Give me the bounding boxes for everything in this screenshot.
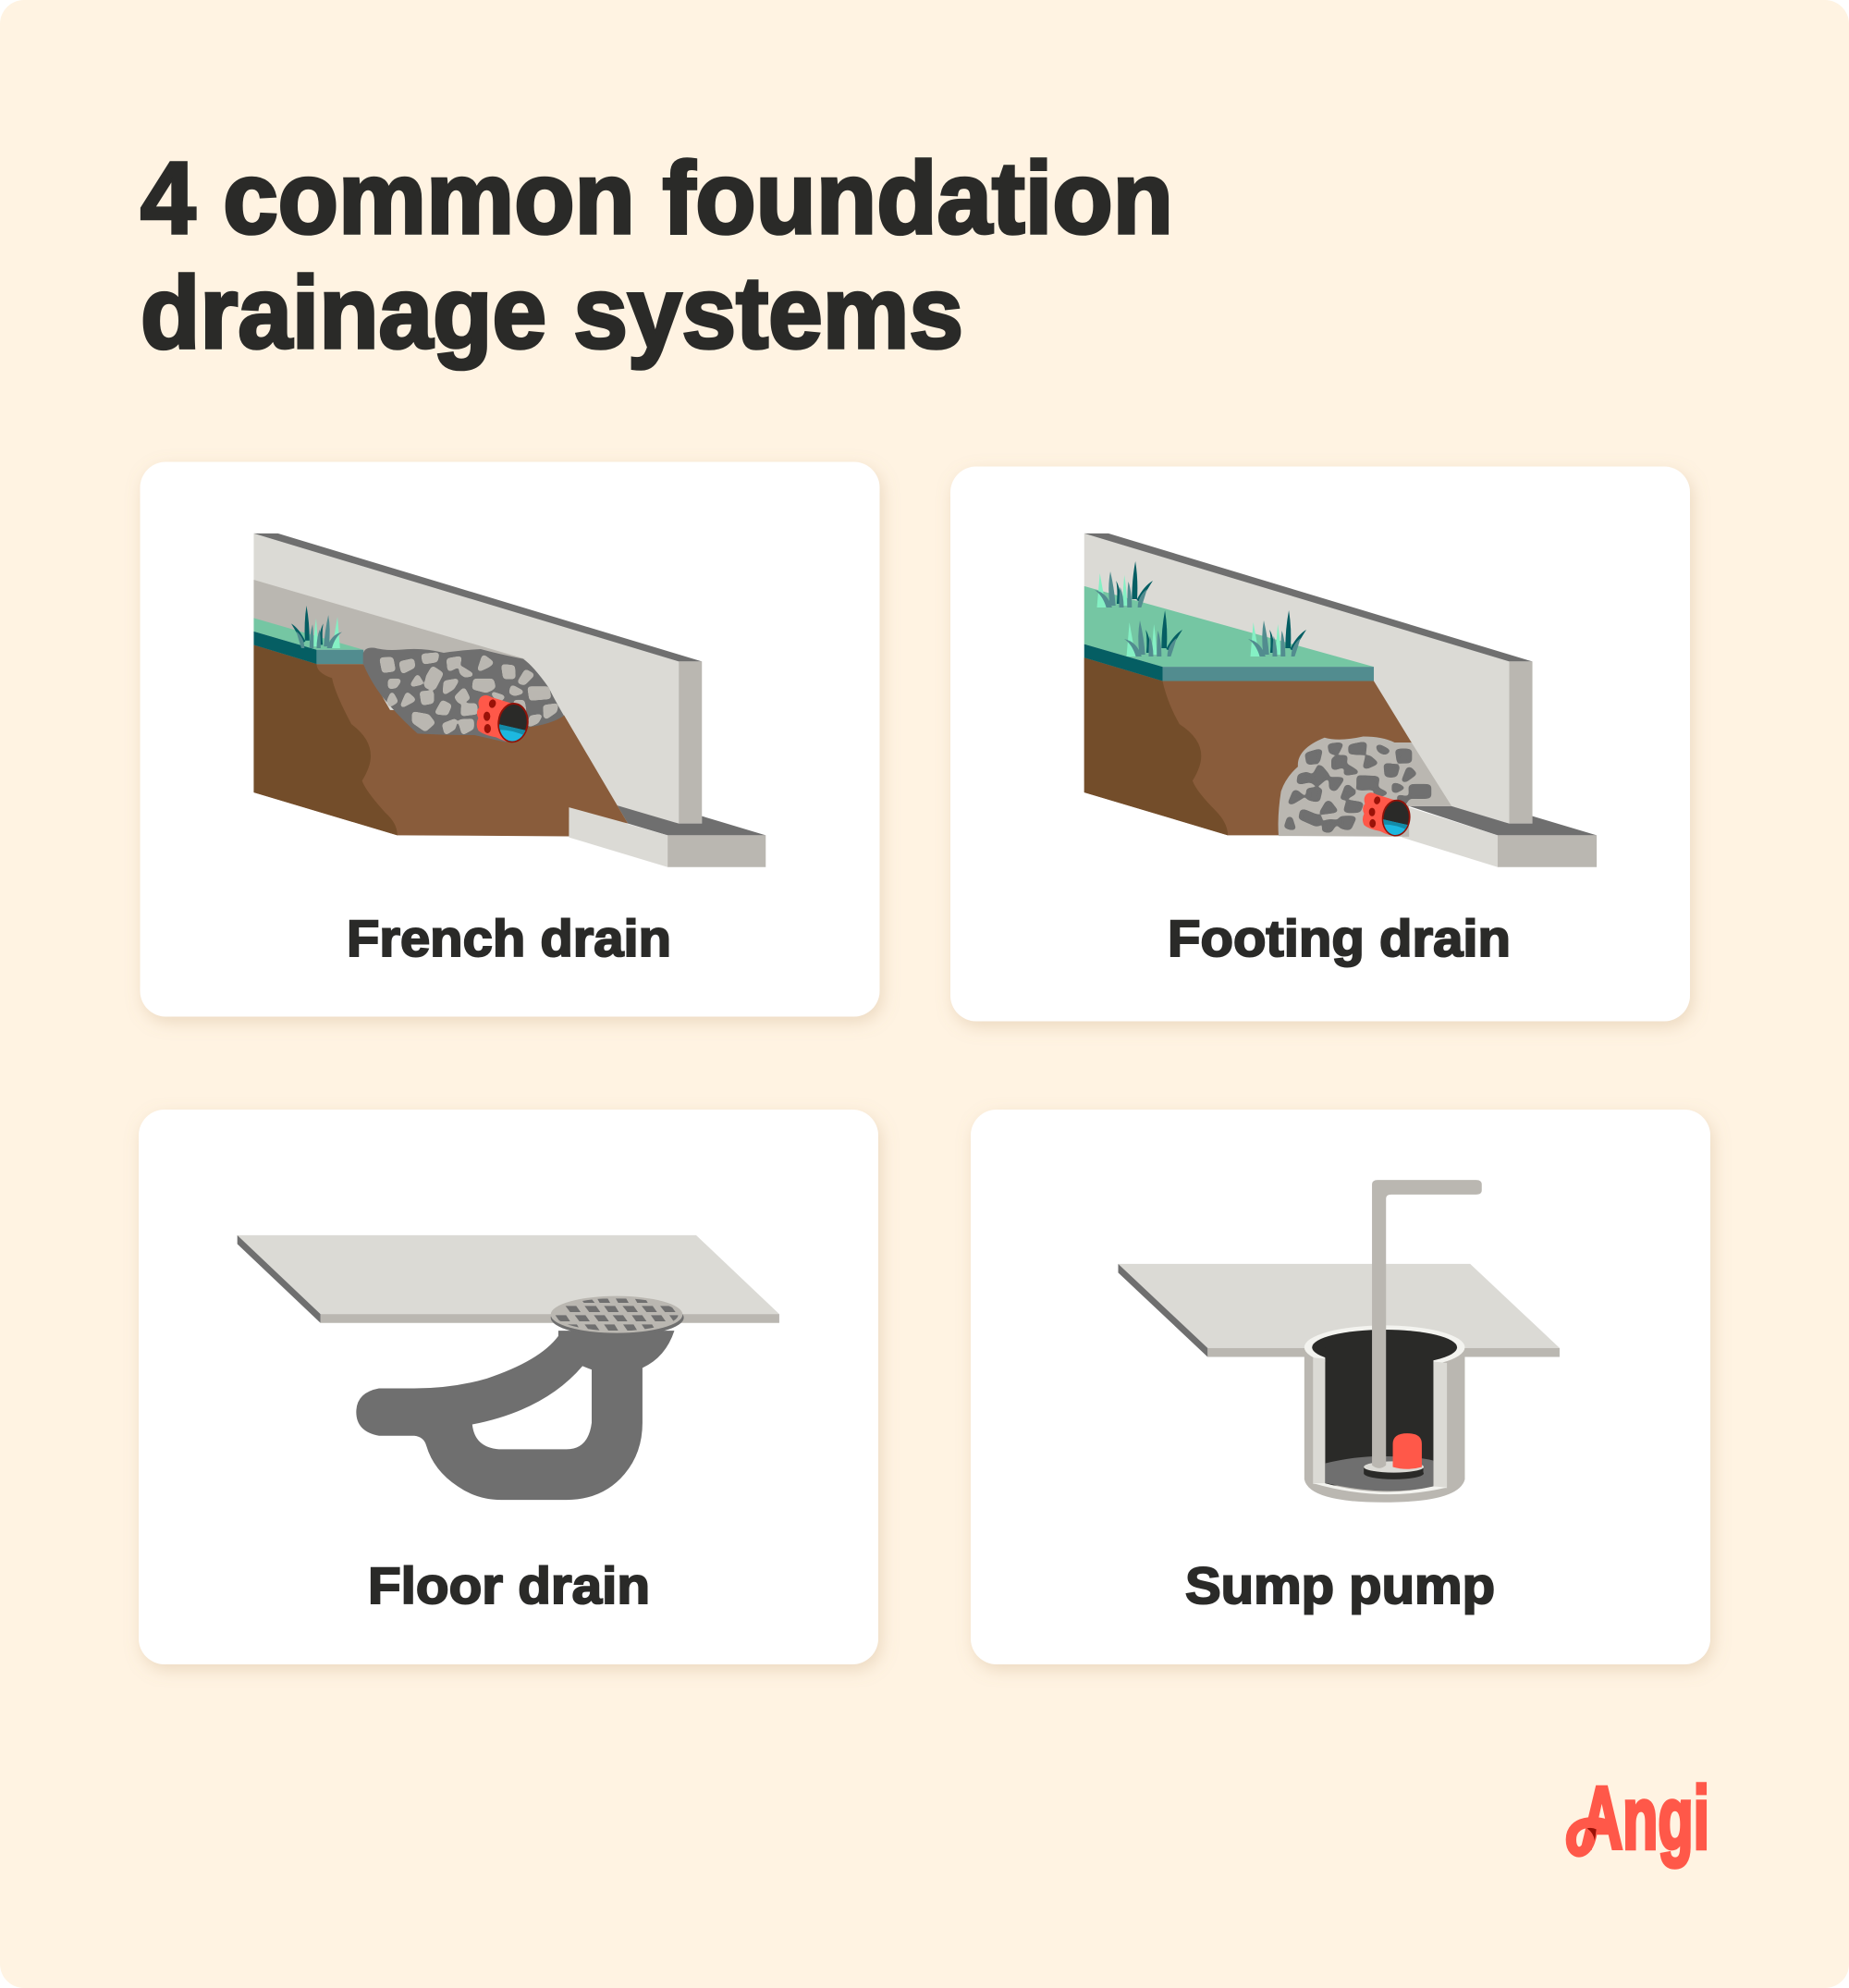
card background bbox=[950, 466, 1690, 1021]
drain trap pipe bbox=[356, 1331, 674, 1500]
gravel bed bbox=[1279, 737, 1451, 837]
perforated drain pipe bbox=[477, 695, 530, 746]
panel: Floor drain bbox=[139, 1110, 878, 1664]
panel: Footing drain bbox=[950, 466, 1690, 1021]
illustration: sump pump bbox=[1119, 1180, 1560, 1503]
title: 4 common foundation bbox=[141, 141, 1173, 255]
soil and grass layers bbox=[253, 618, 628, 836]
panel: Sump pump bbox=[971, 1110, 1710, 1664]
logo: Angi: Angi bbox=[1581, 1769, 1709, 1868]
foundation wall and footing bbox=[1084, 534, 1597, 867]
title bbox=[141, 141, 1173, 370]
drain grate bbox=[551, 1296, 684, 1336]
card background bbox=[139, 1110, 878, 1664]
label: Floor drain: Floor drain bbox=[368, 1556, 650, 1614]
concrete slab bbox=[238, 1235, 779, 1323]
grass tufts bbox=[1095, 561, 1306, 657]
label: Sump pump: Sump pump bbox=[1185, 1556, 1495, 1614]
soil and grass layers bbox=[1084, 586, 1412, 835]
foundation wall and footing bbox=[253, 534, 765, 867]
grass tuft bbox=[291, 606, 342, 648]
title: drainage systems bbox=[141, 256, 963, 370]
illustration: footing drain cross-section bbox=[1084, 534, 1597, 867]
label: Footing drain: Footing drain bbox=[1168, 909, 1511, 967]
perforated drain pipe bbox=[1363, 792, 1412, 840]
concrete slab bbox=[1119, 1264, 1560, 1356]
discharge pipe bbox=[1372, 1180, 1482, 1468]
illustration: French drain cross-section bbox=[253, 534, 765, 867]
gravel bed bbox=[363, 647, 564, 742]
logo: Angi bbox=[1571, 1769, 1709, 1868]
panel: French drain bbox=[141, 462, 880, 1017]
card background bbox=[141, 462, 880, 1017]
illustration: floor drain bbox=[238, 1235, 779, 1500]
sump basin bbox=[1304, 1325, 1464, 1503]
pump base bbox=[1364, 1461, 1424, 1479]
pump body bbox=[1393, 1433, 1422, 1469]
label: French drain: French drain bbox=[347, 909, 671, 967]
card background bbox=[971, 1110, 1710, 1664]
